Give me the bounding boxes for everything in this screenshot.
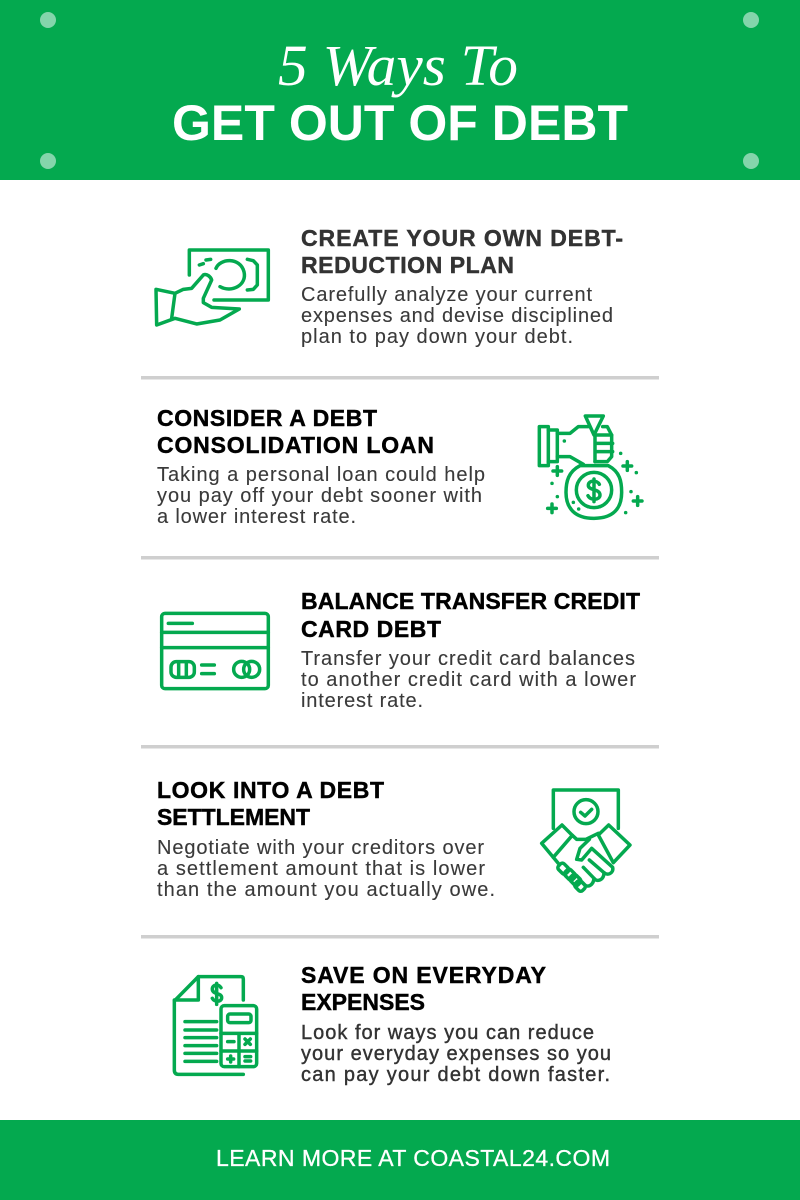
icon: hand holding cash	[156, 250, 268, 325]
heading: CONSOLIDATION LOAN	[157, 432, 434, 458]
panel: step 2	[157, 405, 642, 528]
panel: step 1	[156, 225, 623, 348]
text block: Look for ways you can reduce	[301, 1022, 594, 1044]
icon: handshake with approved document	[542, 790, 630, 892]
text block: you pay off your debt sooner with	[157, 485, 482, 507]
text block: a settlement amount that is lower	[157, 858, 485, 880]
panel: step 3	[162, 588, 640, 712]
text block	[301, 284, 613, 348]
heading: CONSIDER A DEBT	[157, 405, 377, 431]
heading	[157, 777, 384, 830]
text block	[157, 837, 495, 901]
heading	[301, 588, 640, 642]
text block: to another credit card with a lower	[301, 669, 636, 691]
heading: SETTLEMENT	[157, 804, 310, 830]
icon: credit card	[162, 613, 268, 689]
footer banner	[0, 1120, 800, 1200]
panel: step 5	[174, 962, 611, 1086]
heading: BALANCE TRANSFER CREDIT	[301, 588, 640, 614]
panel: step 4	[157, 777, 630, 901]
text block: expenses and devise disciplined	[301, 305, 613, 327]
heading: LOOK INTO A DEBT	[157, 777, 384, 803]
text block: your everyday expenses so you	[301, 1043, 611, 1065]
text block: a lower interest rate.	[157, 506, 356, 528]
title: script line: 5 Ways To	[278, 33, 518, 98]
icon: hand holding money bag	[539, 416, 642, 518]
heading: CARD DEBT	[301, 616, 441, 642]
text block	[157, 464, 485, 528]
header banner	[0, 0, 800, 180]
heading: REDUCTION PLAN	[301, 252, 514, 278]
text block	[301, 648, 636, 712]
heading: EXPENSES	[301, 989, 425, 1015]
heading	[301, 962, 546, 1015]
text block: Carefully analyze your current	[301, 284, 592, 306]
title: main line: GET OUT OF DEBT	[172, 95, 628, 151]
text block: Transfer your credit card balances	[301, 648, 635, 670]
heading: CREATE YOUR OWN DEBT-	[301, 225, 623, 251]
text block: Taking a personal loan could help	[157, 464, 485, 486]
text block: can pay your debt down faster.	[301, 1064, 610, 1086]
text block: interest rate.	[301, 690, 423, 712]
text block: plan to pay down your debt.	[301, 326, 573, 348]
text block: than the amount you actually owe.	[157, 879, 495, 901]
text block	[301, 1022, 611, 1086]
heading: SAVE ON EVERYDAY	[301, 962, 546, 988]
icon: invoice and calculator	[174, 977, 257, 1074]
footer call to action: LEARN MORE AT COASTAL24.COM	[216, 1145, 610, 1171]
text block: Negotiate with your creditors over	[157, 837, 484, 859]
heading	[157, 405, 434, 458]
heading	[301, 225, 623, 278]
